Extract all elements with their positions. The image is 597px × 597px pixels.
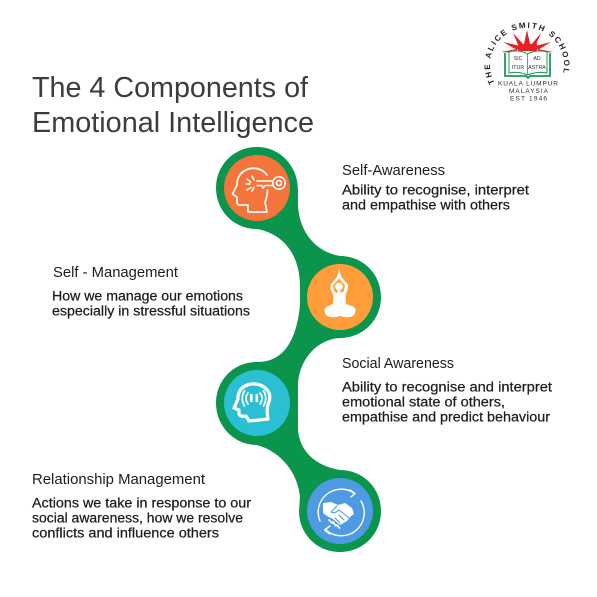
text block: Relationship Management: conflicts and influence others <box>32 526 219 542</box>
icon: head with key <box>224 155 290 221</box>
text block: Social Awareness <box>342 356 552 426</box>
text block: Self - Management: How we manage our emotions <box>52 288 243 304</box>
text block: Self-Awareness: Self-Awareness <box>342 163 445 179</box>
title: Emotional Intelligence <box>32 107 314 139</box>
icon: head with sound waves <box>224 370 290 436</box>
text block: Relationship Management <box>32 472 251 542</box>
icon: handshake with circular arrows <box>307 478 373 544</box>
title <box>32 72 314 139</box>
text block: Relationship Management: Relationship Management <box>32 472 205 488</box>
text block: Self-Awareness <box>342 163 529 214</box>
logo: The Alice Smith School: KUALA LUMPUR <box>498 80 558 88</box>
text block: Social Awareness: Social Awareness <box>342 356 454 372</box>
logo: The Alice Smith School: EST 1946 <box>510 96 547 102</box>
text block: Relationship Management: Actions we take in response to our <box>32 496 251 512</box>
logo: The Alice Smith School: MALAYSIA <box>509 88 549 95</box>
logo: The Alice Smith School: AD <box>533 56 541 62</box>
green serpentine connector <box>216 147 381 552</box>
text block: Self-Awareness: Ability to recognise, interpret <box>342 182 529 198</box>
text block: Self-Awareness: and empathise with others <box>342 198 510 214</box>
text block: Self - Management <box>52 265 250 320</box>
logo: The Alice Smith School: ITUR <box>512 65 524 71</box>
text block: Social Awareness: emotional state of others, <box>342 394 505 410</box>
text block: Social Awareness: empathise and predict behaviour <box>342 410 550 426</box>
text block: Self - Management: especially in stressful situations <box>52 304 250 320</box>
text block: Self - Management: Self - Management <box>53 265 178 281</box>
text block: Relationship Management: social awareness, how we resolve <box>32 510 243 526</box>
icon: meditation figure <box>307 264 373 330</box>
logo: The Alice Smith School: SIC <box>514 56 523 62</box>
logo: The Alice Smith School: THE ALICE SMITH SCHOOL <box>484 22 570 86</box>
logo: The Alice Smith School: ASTRA <box>528 65 546 71</box>
text block: Social Awareness: Ability to recognise and interpret <box>342 380 552 396</box>
title: The 4 Components of <box>32 72 308 104</box>
